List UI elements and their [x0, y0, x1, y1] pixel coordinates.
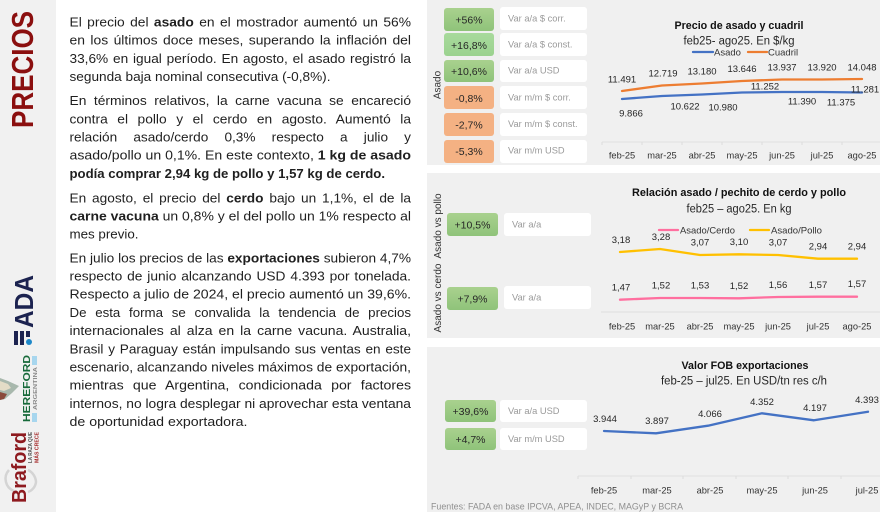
text block: body copy: escenario, alcanzando niveles máximos de exportación,: [70, 360, 411, 374]
panel: exportaciones: [427, 347, 880, 512]
chart: precio de asado y cuadril: may-25: [726, 150, 758, 160]
chart: valor FOB exportaciones: may-25: [746, 486, 778, 496]
badge: -0,8%: [444, 86, 494, 109]
chart: precio de asado y cuadril: 13.646: [727, 64, 757, 75]
badge: +39,6%: [445, 400, 496, 422]
chart: precio de asado y cuadril: 11.491: [608, 74, 636, 86]
badge: +10,5%: [447, 213, 498, 236]
text block: body copy: segunda baja nominal consecutiva (-0,8%).: [70, 69, 330, 84]
chart: precio de asado y cuadril: 13.937: [767, 62, 797, 74]
chart: precio de asado y cuadril: jul-25: [810, 150, 833, 160]
chart: relación asado / pechito de cerdo y pollo: 3,18: [612, 235, 630, 246]
chart: relación asado / pechito de cerdo y pollo: 2,94: [848, 242, 866, 252]
chart: precio de asado y cuadril: 12.719: [648, 68, 678, 80]
badge: -0,8%: -0,8%: [455, 93, 483, 105]
text block: body copy: mientras que Argentina, condicionada por factores: [70, 378, 411, 392]
chart: relación asado / pechito de cerdo y pollo: 1,52: [730, 281, 748, 292]
text block: body copy: En términos relativos, la carne vacuna se encareció: [70, 93, 411, 108]
text block: body copy: [70, 14, 412, 429]
badge: +16,8%: +16,8%: [451, 40, 487, 52]
badge: -5,3%: -5,3%: [455, 146, 483, 158]
chart: precio de asado y cuadril: ago-25: [848, 150, 876, 160]
text block: body copy: internos, no logra desplegar ni aprovechar esta ventana: [70, 396, 412, 411]
chart: relación asado / pechito de cerdo y pollo: 3,28: [652, 232, 670, 243]
badge: +7,9%: +7,9%: [457, 294, 488, 306]
chart: relación asado / pechito de cerdo y pollo: abr-25: [687, 322, 713, 332]
logo: Braford: LA RAZA QUE: [28, 431, 34, 463]
chart: relación asado / pechito de cerdo y pollo: 1,47: [612, 282, 630, 294]
chart: relación asado / pechito de cerdo y pollo: Relación asado / pechito de cerdo y pollo: [632, 187, 846, 199]
label: Var m/m $ corr.: Var m/m $ corr.: [508, 92, 571, 102]
text block: body copy: respecto de junio alcanzando USD 4.393 por tonelada.: [70, 268, 411, 284]
chart: relación asado / pechito de cerdo y pollo: 2,94: [809, 242, 827, 252]
label: Var m/m USD: Var m/m USD: [508, 434, 565, 444]
label: Var a/a: [504, 213, 591, 236]
label: Var m/m USD: [500, 140, 587, 163]
chart: relación asado / pechito de cerdo y pollo: ago-25: [843, 322, 871, 332]
chart: precio de asado y cuadril: 11.390: [788, 96, 816, 108]
chart: precio de asado y cuadril: 10.622: [670, 102, 700, 112]
chart: relación asado / pechito de cerdo y pollo: 3,10: [730, 237, 748, 248]
text block: body copy: De esta forma se convalida la tendencia de precios: [70, 305, 411, 320]
logo: Hereford Argentina: HEREFORD: [22, 355, 33, 422]
text block: body copy: internacionales al alza en la carne vacuna. Australia,: [70, 323, 411, 338]
panel: asado prices: [427, 0, 880, 165]
chart: precio de asado y cuadril: Cuadril: [768, 48, 798, 58]
label: Var m/m USD: [500, 428, 587, 450]
chart: precio de asado y cuadril: feb-25: [609, 150, 635, 160]
badge: +56%: [444, 8, 494, 31]
text block: body copy: 33,6% en igual período. En agosto, el asado registró la: [70, 51, 412, 66]
text block: body copy: En agosto, el precio del cerdo bajo un 1,1%, el de la: [70, 190, 412, 206]
chart: valor FOB exportaciones: 4.066: [698, 409, 722, 420]
image: cattle: [0, 378, 19, 400]
chart: precio de asado y cuadril: [602, 20, 880, 160]
chart: relación asado / pechito de cerdo y pollo: mar-25: [645, 322, 675, 332]
logo: Braford: Braford: [9, 432, 31, 503]
label: Var m/m $ corr.: [500, 86, 587, 109]
chart: precio de asado y cuadril: 14.048: [847, 62, 877, 74]
text block: body copy: contra el pollo y el cerdo en agosto. Aumentó la: [70, 112, 412, 126]
chart: precio de asado y cuadril: 10.980: [708, 102, 738, 114]
chart: valor FOB exportaciones: 4.352: [750, 397, 774, 408]
chart: relación asado / pechito de cerdo y pollo: feb-25: [609, 322, 635, 332]
text block: body copy: podía comprar 2,94 kg de pollo y 1,57 kg de cerdo.: [70, 166, 385, 181]
chart: precio de asado y cuadril: 13.180: [687, 66, 717, 78]
badge: +10,6%: [444, 60, 494, 82]
logo: Braford: [6, 431, 40, 503]
chart: valor FOB exportaciones: 4.393: [855, 395, 879, 406]
chart: precio de asado y cuadril: feb25- ago25. En $/kg: [684, 36, 794, 48]
text block: body copy: carne vacuna un 0,8% y el del pollo un 1% respecto al: [70, 208, 411, 224]
logo: Hereford Argentina: ARGENTINA: [33, 367, 39, 410]
chart: precio de asado y cuadril: Asado: [714, 48, 741, 58]
badge: +7,9%: [447, 287, 498, 310]
chart: valor FOB exportaciones: [578, 360, 880, 496]
chart: relación asado / pechito de cerdo y pollo: 3,07: [769, 238, 787, 248]
label: Var m/m $ const.: [500, 113, 587, 136]
badge: +56%: +56%: [455, 14, 483, 26]
chart: precio de asado y cuadril: jun-25: [768, 150, 795, 160]
chart: relación asado / pechito de cerdo y pollo: 1,53: [691, 280, 709, 292]
badge: +4,7%: [445, 428, 496, 450]
chart: relación asado / pechito de cerdo y pollo: 1,57: [809, 280, 827, 291]
badge: -2,7%: -2,7%: [455, 120, 483, 132]
chart: relación asado / pechito de cerdo y pollo: 1,52: [652, 280, 670, 292]
chart: precio de asado y cuadril: 11.375: [827, 98, 855, 108]
label: Var a/a: Var a/a: [512, 292, 542, 302]
badge: -5,3%: [444, 140, 494, 163]
panel: relación asado: [427, 173, 880, 338]
chart: relación asado / pechito de cerdo y pollo: Asado/Cerdo: [680, 226, 735, 236]
badge: +16,8%: [444, 33, 494, 56]
chart: valor FOB exportaciones: mar-25: [642, 486, 672, 496]
chart: relación asado / pechito de cerdo y pollo: jun-25: [764, 322, 791, 332]
axis label: Asado vs cerdo: Asado vs cerdo: [433, 263, 444, 332]
text block: body copy: mes previo.: [70, 226, 138, 242]
sidebar: [0, 0, 56, 512]
chart: valor FOB exportaciones: 4.197: [803, 403, 827, 414]
badge: +4,7%: +4,7%: [455, 434, 486, 446]
label: Var a/a USD: [500, 400, 587, 422]
label: Var a/a USD: [500, 60, 587, 82]
axis label: Asado vs pollo: Asado vs pollo: [433, 193, 444, 259]
chart: relación asado / pechito de cerdo y pollo: may-25: [723, 322, 755, 332]
label: Var a/a $ corr.: Var a/a $ corr.: [508, 14, 566, 24]
label: Var a/a $ const.: Var a/a $ const.: [508, 40, 572, 50]
chart: relación asado / pechito de cerdo y pollo: 1,57: [848, 279, 866, 290]
chart: relación asado / pechito de cerdo y pollo: [601, 187, 880, 332]
badge: -2,7%: [444, 113, 494, 136]
badge: +39,6%: +39,6%: [453, 406, 488, 418]
label: Var a/a $ const.: [500, 33, 587, 56]
logo: FADA: ADA: [9, 275, 39, 328]
label: Var a/a USD: Var a/a USD: [508, 66, 560, 76]
text block: body copy: Brasil y Paraguay están impulsando sus ventas en este: [70, 342, 411, 356]
label: Var m/m USD: Var m/m USD: [508, 146, 565, 156]
chart: precio de asado y cuadril: abr-25: [689, 150, 715, 160]
chart: precio de asado y cuadril: 11.252: [751, 82, 779, 92]
chart: relación asado / pechito de cerdo y pollo: 1,56: [769, 280, 787, 291]
chart: relación asado / pechito de cerdo y pollo: feb25 – ago25. En kg: [686, 204, 792, 216]
label: Var a/a: Var a/a: [512, 220, 542, 230]
chart: relación asado / pechito de cerdo y pollo: jul-25: [806, 322, 829, 332]
chart: valor FOB exportaciones: 3.944: [593, 414, 617, 425]
logo: Hereford Argentina: [22, 355, 39, 422]
chart: precio de asado y cuadril: Precio de asado y cuadril: [674, 20, 804, 32]
chart: precio de asado y cuadril: 11.281: [851, 84, 879, 96]
text block: body copy: En julio los precios de las exportaciones subieron 4,7%: [70, 250, 411, 266]
chart: valor FOB exportaciones: jun-25: [801, 486, 828, 496]
label: Var a/a $ corr.: [500, 7, 587, 30]
chart: precio de asado y cuadril: mar-25: [647, 150, 677, 160]
chart: valor FOB exportaciones: 3.897: [645, 416, 669, 427]
chart: relación asado / pechito de cerdo y pollo: Asado/Pollo: [771, 226, 822, 236]
text block: body copy: Respecto a julio de 2024, el precio aumentó un 39,6%.: [70, 286, 411, 302]
text block: body copy: asado/pollo un 0,1%. En este contexto, 1 kg de asado: [70, 148, 411, 162]
text block: body copy: El precio del asado en el mostrador aumentó un 56%: [70, 14, 411, 30]
logo: Braford: MÁS CRECE: [34, 432, 40, 463]
chart: valor FOB exportaciones: feb-25: [591, 486, 617, 496]
axis label: Asado: Asado: [432, 70, 444, 99]
label: Var a/a USD: Var a/a USD: [508, 406, 560, 416]
text block: body copy: relación asado/cerdo 0,3% respecto a julio y: [70, 130, 411, 144]
chart: precio de asado y cuadril: 9.866: [619, 108, 643, 120]
label: Var m/m $ const.: Var m/m $ const.: [508, 119, 578, 129]
text block: body copy: en los últimos doce meses, superando la inflación del: [70, 32, 411, 48]
badge: +10,6%: +10,6%: [451, 66, 487, 78]
badge: +10,5%: +10,5%: [455, 220, 490, 232]
chart: valor FOB exportaciones: Valor FOB exportaciones: [682, 360, 808, 372]
text block: body copy: de oportunidad exportadora.: [70, 414, 248, 429]
chart: valor FOB exportaciones: abr-25: [697, 486, 723, 496]
chart: valor FOB exportaciones: jul-25: [855, 486, 878, 496]
chart: relación asado / pechito de cerdo y pollo: 3,07: [691, 238, 709, 248]
label: Var a/a: [504, 286, 591, 309]
chart: precio de asado y cuadril: 13.920: [807, 62, 837, 74]
chart: valor FOB exportaciones: feb-25 – jul25. En USD/tn res c/h: [661, 376, 827, 388]
